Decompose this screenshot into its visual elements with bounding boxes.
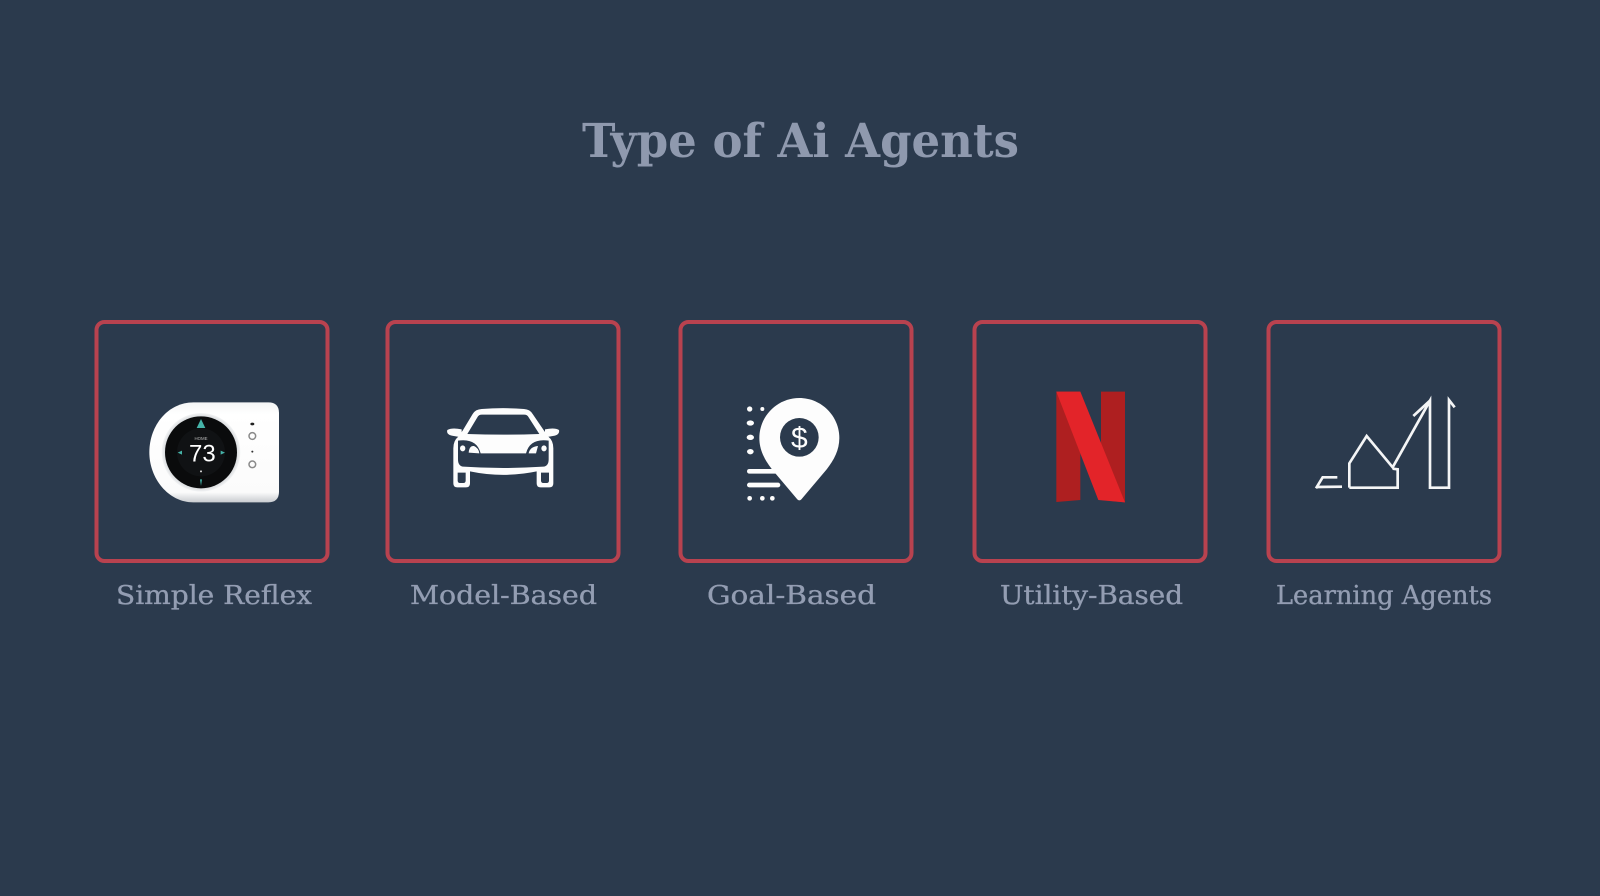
icon: red N logo (1056, 392, 1125, 502)
icon: location pin with dollar (747, 398, 839, 501)
icon: smart thermostat (149, 402, 279, 502)
panel: Utility-Based (974, 322, 1206, 611)
label: Utility-Based: Utility-Based (1000, 581, 1183, 611)
icon: smart thermostat: HOME (194, 436, 208, 441)
icon: smart thermostat: 73 (189, 441, 216, 468)
title: Type of Ai Agents (582, 114, 1019, 169)
panel: Simple Reflex (96, 322, 328, 611)
panel: Model-Based (388, 322, 618, 611)
icon: car front (447, 408, 559, 487)
label: Model-Based: Model-Based (410, 581, 597, 611)
label: Goal-Based: Goal-Based (707, 581, 876, 611)
panel: Learning Agents (1268, 322, 1500, 611)
icon: rising line chart with arrows (1316, 400, 1455, 488)
label: Simple Reflex: Simple Reflex (116, 581, 312, 611)
panel: Goal-Based (680, 322, 912, 611)
label: Learning Agents: Learning Agents (1276, 581, 1492, 611)
icon: location pin with dollar: $ (791, 422, 808, 455)
